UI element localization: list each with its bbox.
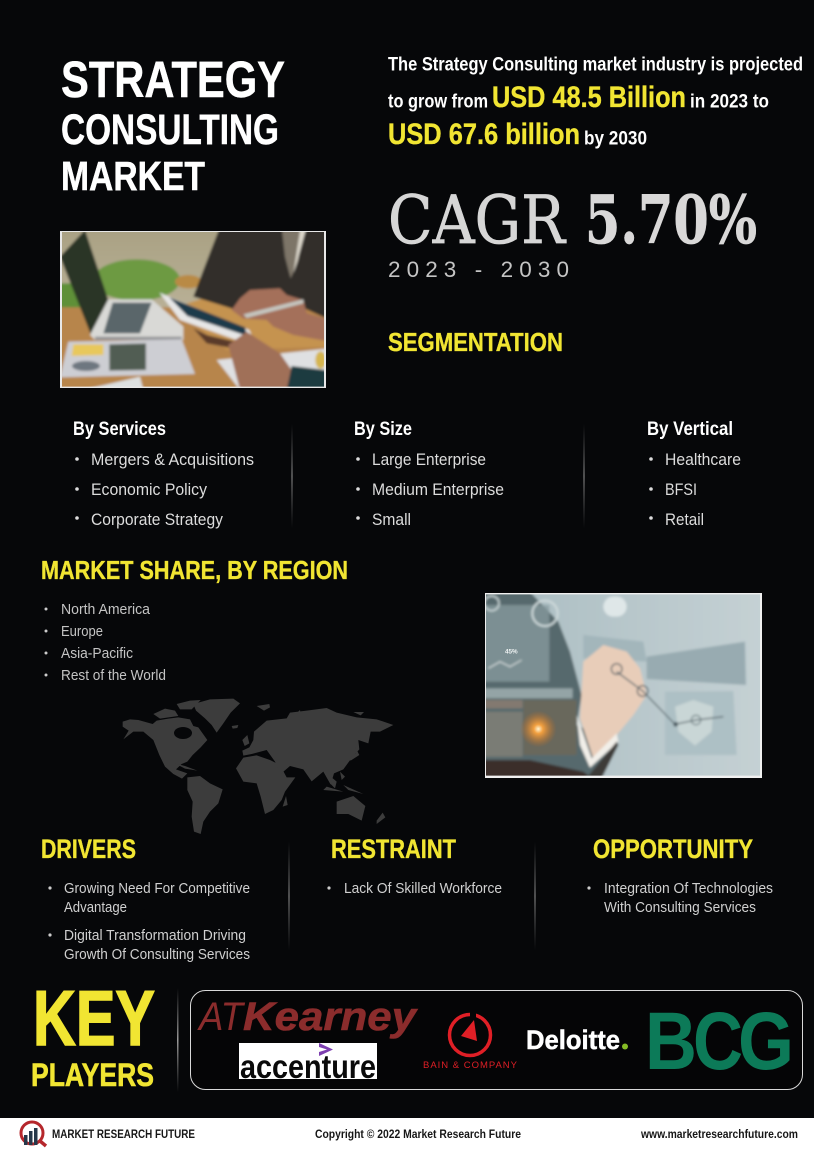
logo: Bain and Company: BAIN & COMPANY <box>423 1060 518 1071</box>
drivers list: Growth Of Consulting Services <box>64 946 250 963</box>
title <box>61 51 285 199</box>
region list <box>44 601 166 684</box>
region list: Europe <box>61 623 103 640</box>
heading: key players: PLAYERS <box>31 1057 154 1093</box>
logo: Accenture: accenture <box>240 1048 376 1085</box>
heading: opportunity: OPPORTUNITY <box>593 834 753 864</box>
drivers list: Digital Transformation Driving <box>64 927 246 944</box>
region list: Rest of the World <box>61 667 166 684</box>
segment: by services: By Services <box>73 419 166 440</box>
heading: segmentation: SEGMENTATION <box>388 327 563 357</box>
CAGR figure: 5.70% <box>585 181 757 259</box>
photo: hand drawing on digital dashboard <box>480 588 767 782</box>
segment: by size: Medium Enterprise <box>372 480 504 499</box>
CAGR period: 2023 - 2030 <box>388 257 569 282</box>
market projection text: in 2023 to <box>690 90 769 112</box>
CAGR figure <box>388 181 757 259</box>
segment: by size: Small <box>372 510 411 529</box>
drivers list <box>48 880 250 963</box>
footer brand name: MARKET RESEARCH FUTURE <box>52 1127 195 1141</box>
segment: by vertical: BFSI <box>665 480 697 499</box>
segment: by size: By Size <box>354 419 412 440</box>
logo: BCG: C <box>693 996 743 1087</box>
market projection text: by 2030 <box>584 128 647 150</box>
heading: key players <box>31 974 155 1093</box>
region list: North America <box>61 601 151 618</box>
heading: key players: KEY <box>33 974 155 1062</box>
segment: by vertical: By Vertical <box>647 419 733 440</box>
photo: business team with tablet <box>57 227 330 393</box>
photo: hand drawing on digital dashboard: 45% <box>505 648 518 655</box>
market projection text <box>388 54 803 151</box>
logo: BCG: G <box>738 996 794 1087</box>
opportunity list <box>587 880 773 916</box>
heading: restraint: RESTRAINT <box>331 834 456 864</box>
heading: market share by region: MARKET SHARE, BY REGION <box>41 555 348 585</box>
logo: BCG <box>645 996 794 1087</box>
panel: key player logos <box>190 990 802 1090</box>
title: MARKET <box>61 153 205 199</box>
segment: by vertical: Healthcare <box>665 450 741 469</box>
world map <box>123 699 393 834</box>
segment: by services <box>73 419 254 529</box>
logo: Bain and Company <box>423 1012 518 1071</box>
segment: by size <box>354 419 504 529</box>
opportunity list: With Consulting Services <box>604 899 756 916</box>
segment: by services: Corporate Strategy <box>91 510 223 529</box>
title: STRATEGY <box>61 51 285 108</box>
footer bar <box>0 1118 814 1150</box>
segment: by vertical: Retail <box>665 510 704 529</box>
CAGR figure: CAGR <box>388 182 567 259</box>
heading: drivers: DRIVERS <box>41 834 136 864</box>
segment: by vertical <box>647 419 741 529</box>
logo: AT Kearney: Kearney <box>243 995 418 1039</box>
map hudson bay cut-out <box>174 727 192 739</box>
market projection text: USD 48.5 Billion <box>492 81 686 114</box>
drivers list: Growing Need For Competitive <box>64 880 250 897</box>
title: CONSULTING <box>61 106 279 154</box>
footer copyright: Copyright © 2022 Market Research Future <box>315 1127 521 1141</box>
segment: by services: Mergers & Acquisitions <box>91 450 254 469</box>
logo: BCG: B <box>645 996 697 1087</box>
region list: Asia-Pacific <box>61 645 133 662</box>
footer logo: magnifier with bars <box>21 1122 46 1146</box>
segment: by size: Large Enterprise <box>372 450 486 469</box>
logo: AT Kearney: AT <box>197 995 245 1039</box>
market projection text: USD 67.6 billion <box>388 118 580 151</box>
opportunity list: Integration Of Technologies <box>604 880 773 897</box>
segment: by services: Economic Policy <box>91 480 207 499</box>
drivers list: Advantage <box>64 899 127 916</box>
market projection text: to grow from <box>388 90 488 112</box>
restraint list: Lack Of Skilled Workforce <box>344 880 502 897</box>
logo: Deloitte: Deloitte <box>526 1025 620 1055</box>
